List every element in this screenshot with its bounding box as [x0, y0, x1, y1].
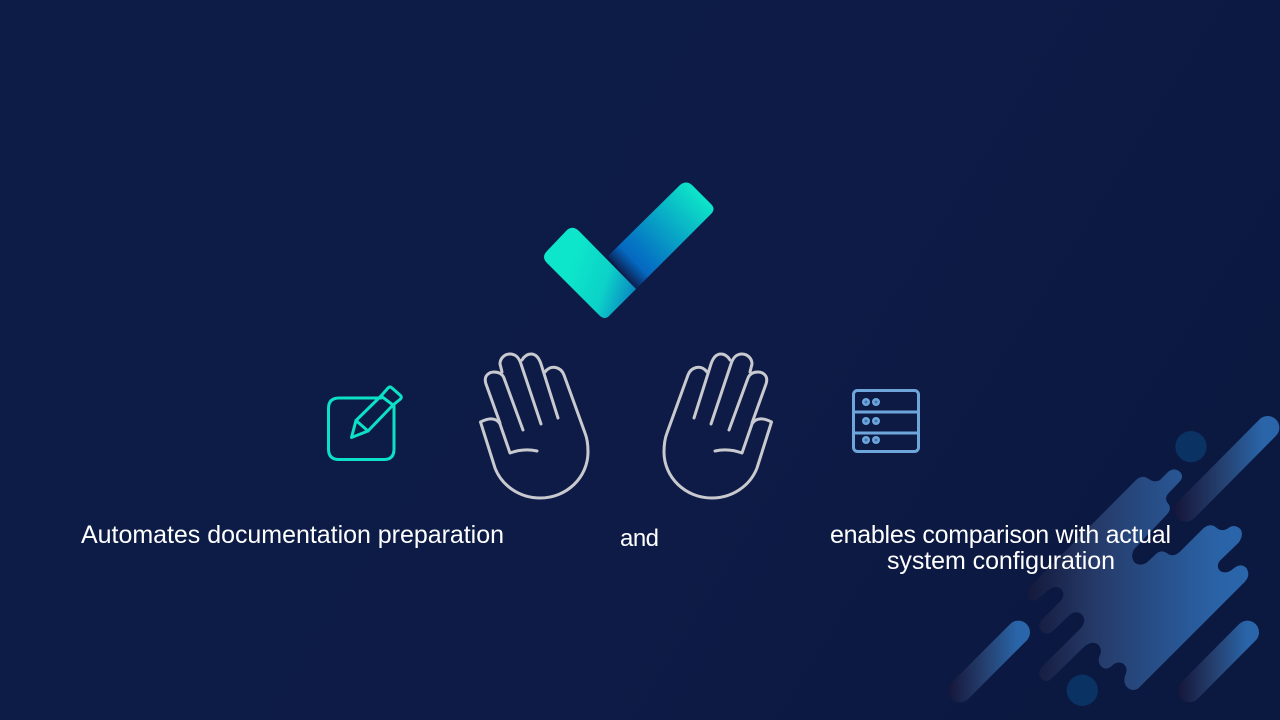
splash: upper dot [1175, 431, 1207, 462]
icon: check mark logo [544, 182, 714, 318]
decorative blue splash, bottom right [960, 428, 1268, 706]
icon: pencil editing a document [328, 387, 401, 460]
text: comparison caption [830, 521, 1171, 575]
splash: central blob [1027, 469, 1248, 690]
splash: lower right pill [1189, 632, 1247, 691]
text: documentation caption: Automates documentation preparation [81, 521, 504, 549]
icon: right raised hand [664, 354, 772, 498]
icon: left raised hand [480, 354, 588, 498]
splash: upper right pill [1186, 428, 1268, 510]
splash: lower dot [1067, 675, 1098, 706]
icon: server rack [854, 390, 918, 452]
splash: lower left pill [960, 632, 1018, 691]
text: comparison caption: enables comparison with actual [830, 521, 1171, 549]
text: and: and [620, 525, 659, 552]
text: comparison caption: system configuration [887, 547, 1115, 575]
